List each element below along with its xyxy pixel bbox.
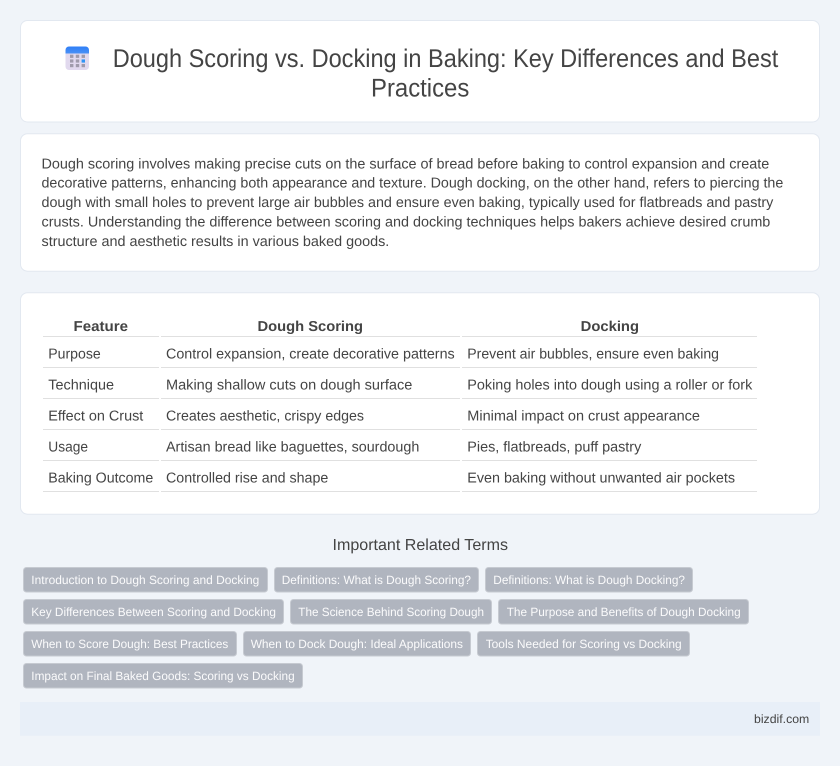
tag [24,632,236,656]
text block: introduction paragraph [42,156,783,250]
panel: comparison table [20,293,820,514]
table row: technique: Poking holes into dough using a roller or fork [467,377,753,393]
title: Dough Scoring vs. Docking in Baking: Key Differences and Best [113,45,778,73]
tag [24,600,284,624]
table row: usage [43,439,757,461]
table header row: Dough Scoring [258,319,363,335]
table row: purpose: Control expansion, create decorative patterns [166,346,455,362]
tag [498,600,748,624]
tag [274,568,478,592]
tag: The Purpose and Benefits of Dough Docking [507,605,741,619]
tag [486,568,692,592]
table row: effect on crust: Effect on Crust [48,408,143,424]
table header row: Feature [74,319,128,335]
table row: technique: Technique [48,377,114,393]
text block: introduction paragraph: Dough scoring involves making precise cuts on the surface of bread before baking to control expansion and create [42,156,769,172]
text block: introduction paragraph: decorative patterns, enhancing both appearance and texture. Dough docking, on the other hand, refers to piercing the [42,176,783,192]
related terms tags [24,568,748,688]
text block: introduction paragraph: structure and aesthetic results in various baked goods. [42,234,389,250]
table row: technique [43,377,757,399]
title: Practices [371,74,469,102]
text block: introduction paragraph: crusts. Understanding the difference between scoring and docking techniques helps bakers achieve desired crumb [42,214,770,230]
table row: baking outcome: Even baking without unwanted air pockets [467,470,735,486]
table row: usage: Artisan bread like baguettes, sourdough [166,439,419,455]
tag [290,600,492,624]
table row: baking outcome [43,470,757,492]
panel: introduction [20,134,820,271]
tag: Introduction to Dough Scoring and Docking [31,573,259,587]
tag [24,664,302,688]
tag: Tools Needed for Scoring vs Docking [486,637,682,651]
table row: effect on crust: Minimal impact on crust appearance [467,408,700,424]
table row: effect on crust: Creates aesthetic, crispy edges [166,408,364,424]
table row: baking outcome: Controlled rise and shape [166,470,328,486]
table row: purpose: Prevent air bubbles, ensure even baking [467,346,719,362]
tag [24,568,268,592]
tag: When to Dock Dough: Ideal Applications [251,637,463,651]
table header row: Docking [581,319,639,335]
table row: purpose: Purpose [48,346,101,362]
tag: Definitions: What is Dough Docking? [493,573,685,587]
title [113,45,778,102]
panel: header [20,20,820,122]
table row: effect on crust [43,408,757,430]
icon: calendar [66,46,89,70]
table row: technique: Making shallow cuts on dough surface [166,377,412,393]
table row: usage: Pies, flatbreads, puff pastry [467,439,642,455]
tag [478,632,690,656]
tag: When to Score Dough: Best Practices [31,637,228,651]
tag: Impact on Final Baked Goods: Scoring vs Docking [31,669,295,683]
table row: usage: Usage [48,439,88,455]
heading: important related terms: Important Related Terms [332,537,508,554]
table header row [43,319,757,337]
tag: Key Differences Between Scoring and Docking [31,605,276,619]
footer: bizdif.com [754,712,809,726]
tag [244,632,470,656]
tag: Definitions: What is Dough Scoring? [282,573,471,587]
tag: The Science Behind Scoring Dough [298,605,484,619]
text block: introduction paragraph: dough with small holes to prevent large air bubbles and ensure even baking, typically used for flatbreads and pastry [42,195,774,211]
footer [20,702,820,736]
table row: purpose [43,346,757,368]
table row: baking outcome: Baking Outcome [48,470,153,486]
